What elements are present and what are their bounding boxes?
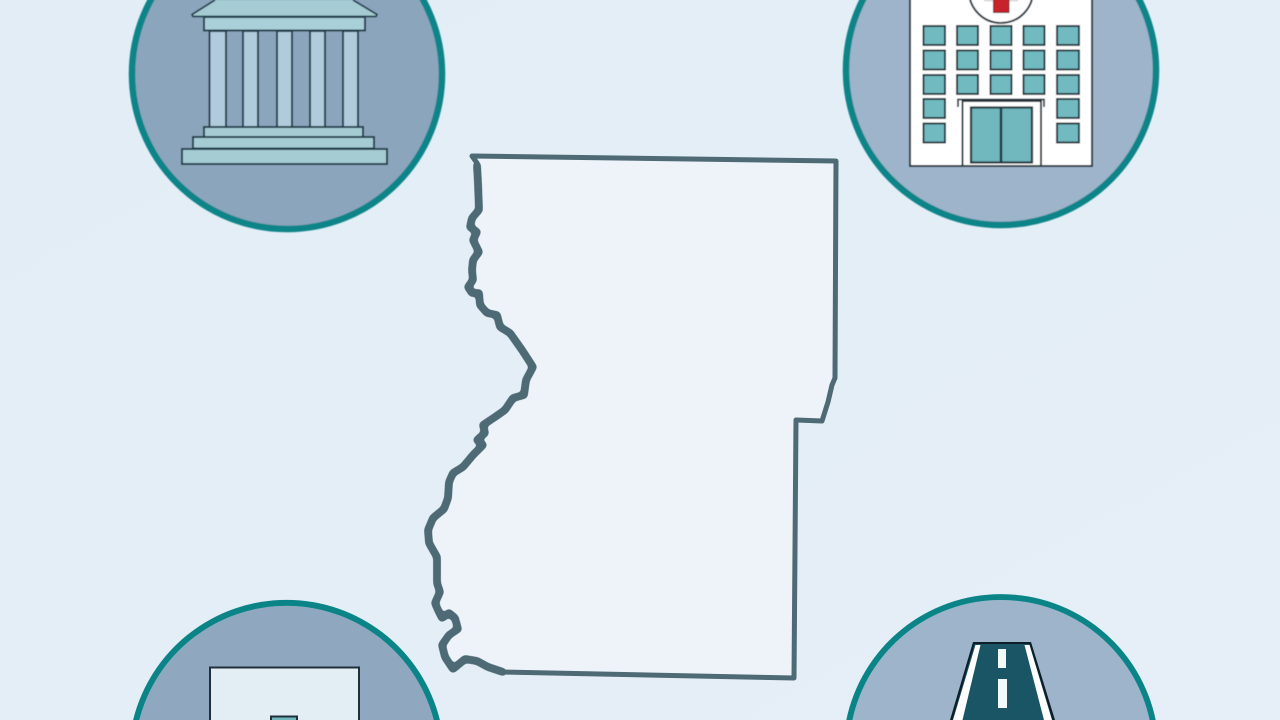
icon: road in circle — [846, 594, 1156, 720]
hospital entrance — [958, 100, 1044, 166]
icon: hospital in circle — [846, 0, 1156, 225]
school window — [270, 716, 298, 720]
county map — [428, 156, 836, 678]
school building wall — [209, 666, 360, 720]
hospital windows — [924, 26, 1079, 142]
road surface — [950, 642, 1055, 720]
hospital building — [910, 0, 1092, 166]
map fill and straight borders — [428, 156, 836, 678]
road asphalt — [952, 644, 1052, 720]
school circle background — [139, 606, 434, 720]
winding river border — [428, 165, 533, 672]
building entablature — [204, 17, 365, 30]
hospital emblem with red cross — [969, 0, 1033, 23]
icon: government building in circle — [132, 0, 442, 229]
building roof — [192, 0, 377, 16]
building columns — [210, 31, 358, 127]
road circle background — [852, 600, 1150, 720]
icon: school building in circle — [133, 600, 440, 720]
building steps — [182, 127, 387, 164]
school wall outline — [209, 666, 360, 720]
road edge lines — [953, 645, 1052, 720]
school circle ring — [133, 600, 440, 720]
school window glass — [272, 718, 296, 720]
road centre dashes — [998, 649, 1007, 708]
road circle ring — [846, 594, 1156, 720]
